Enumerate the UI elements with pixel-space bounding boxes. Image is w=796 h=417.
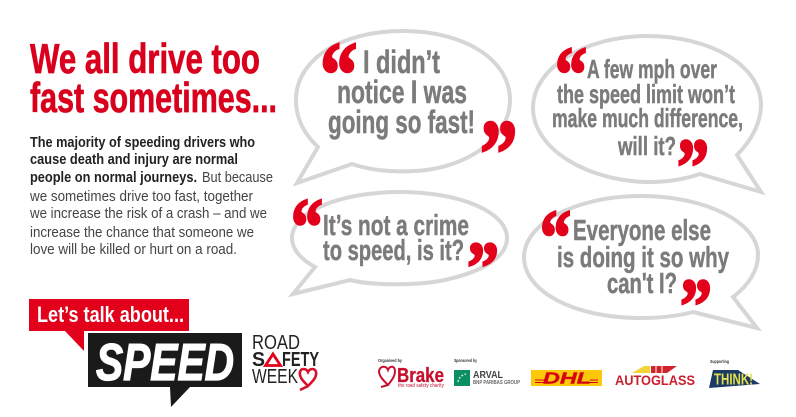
bubble text: A few mph over bbox=[587, 54, 717, 84]
red triangle bbox=[266, 354, 280, 366]
black speech box bbox=[88, 333, 242, 407]
bubble text: to speed, is it? bbox=[323, 235, 464, 267]
logo: Arval bbox=[454, 358, 521, 386]
logo: Brake: Organised by bbox=[378, 358, 402, 363]
bubble outline bbox=[292, 192, 507, 294]
speech bubble: not a crime bbox=[291, 182, 507, 308]
SPEED word: SPEED bbox=[96, 334, 234, 392]
logo: Autoglass bbox=[615, 366, 695, 388]
close quote: ” bbox=[680, 265, 712, 349]
navy sign bbox=[709, 370, 760, 388]
red box text: Let’s talk about... bbox=[37, 302, 184, 327]
logo: Think! bbox=[709, 359, 760, 388]
green square bbox=[454, 370, 470, 386]
intro text block: we increase the risk of a crash – and we bbox=[29, 206, 267, 222]
bubble text bbox=[557, 215, 729, 300]
flag shapes bbox=[632, 366, 650, 373]
logo: DHL bbox=[531, 370, 602, 388]
bubble outline bbox=[296, 31, 510, 183]
logo: Brake bbox=[378, 358, 444, 389]
logo: Arval: Sponsored by bbox=[454, 358, 477, 363]
intro text block bbox=[29, 135, 273, 258]
logo: Brake: the road safety charity bbox=[398, 383, 444, 389]
speech bubble: everyone else bbox=[524, 196, 758, 349]
open quote: “ bbox=[320, 23, 357, 127]
bubble text bbox=[328, 44, 475, 140]
intro text block: we sometimes drive too fast, together bbox=[29, 189, 253, 205]
bubble text: is doing it so why bbox=[557, 242, 729, 274]
road safety week logo: ROAD bbox=[252, 332, 300, 354]
bubble text bbox=[552, 54, 743, 161]
intro text block: But because bbox=[202, 170, 273, 186]
road safety week logo: FETY bbox=[282, 349, 319, 371]
logo: Think!: THINK! bbox=[714, 372, 753, 388]
bubble text: can't I? bbox=[607, 268, 677, 300]
logo: Arval: BNP PARIBAS GROUP bbox=[473, 380, 521, 386]
bubble outline bbox=[524, 196, 758, 328]
red heart bbox=[300, 369, 316, 390]
title: We all drive too bbox=[30, 35, 260, 82]
bubble text bbox=[323, 210, 469, 267]
intro text block: The majority of speeding drivers who bbox=[30, 135, 255, 151]
close quote: ” bbox=[677, 122, 709, 212]
red stripes bbox=[535, 380, 598, 382]
intro text block: increase the chance that someone we bbox=[30, 225, 254, 241]
close quote: ” bbox=[480, 100, 518, 207]
bubble text: It’s not a crime bbox=[323, 210, 469, 242]
open quote: “ bbox=[555, 33, 587, 117]
campaign badge: Let's talk about bbox=[29, 299, 189, 351]
road safety week logo bbox=[252, 332, 319, 390]
road safety week logo: S bbox=[252, 349, 265, 371]
logo: DHL: DHL bbox=[543, 370, 591, 388]
intro text block: cause death and injury are normal bbox=[30, 152, 238, 168]
logo: Arval: ARVAL bbox=[473, 369, 503, 381]
open quote: “ bbox=[291, 182, 323, 272]
close quote: ” bbox=[467, 227, 499, 308]
campaign badge: SPEED bbox=[88, 333, 242, 407]
speech bubble: a few mph bbox=[533, 33, 761, 212]
road safety week logo: WEEK bbox=[252, 366, 299, 388]
logo: Brake: Brake bbox=[397, 365, 444, 387]
speech bubble: I didn't notice bbox=[296, 23, 518, 207]
open quote: “ bbox=[540, 196, 571, 281]
bubble text: Everyone else bbox=[573, 215, 711, 247]
title bbox=[30, 35, 277, 121]
bubble text: will it? bbox=[617, 131, 676, 161]
logo: Autoglass: AUTOGLASS bbox=[615, 372, 695, 388]
intro text block: love will be killed or hurt on a road. bbox=[30, 242, 237, 258]
red speech box bbox=[29, 299, 189, 351]
heart icon bbox=[379, 367, 395, 387]
bubble text: notice I was bbox=[337, 74, 467, 110]
bubble text: I didn’t bbox=[363, 44, 440, 80]
logo: Think!: Supporting bbox=[710, 359, 729, 364]
bubble outline bbox=[533, 36, 761, 192]
title: fast sometimes... bbox=[30, 74, 277, 121]
bubble text: going so fast! bbox=[328, 104, 475, 140]
intro text block: people on normal journeys. bbox=[30, 170, 197, 186]
